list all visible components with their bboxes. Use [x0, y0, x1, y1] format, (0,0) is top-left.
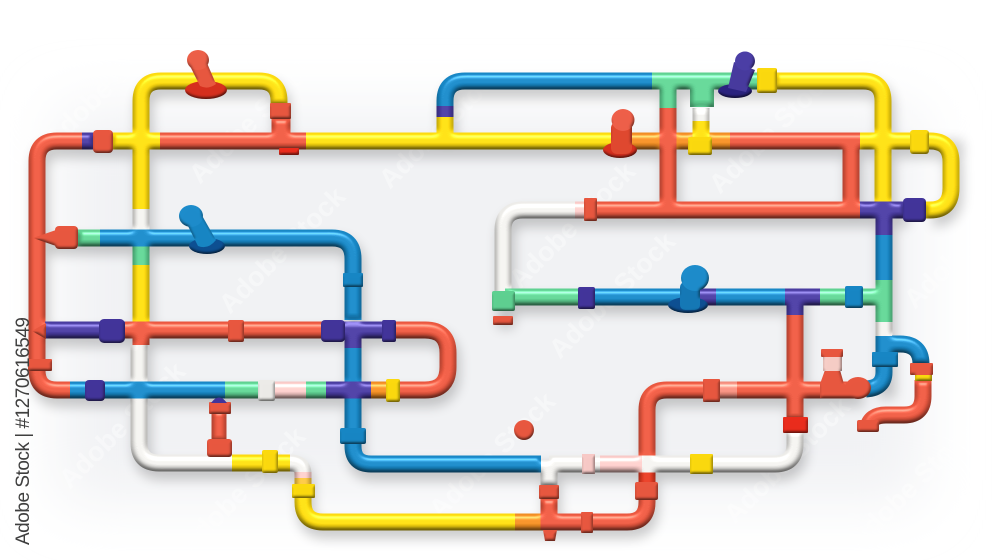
- valve: purple top right: [718, 52, 755, 98]
- watermarks: Adobe Stock: [503, 156, 642, 294]
- watermarks: Adobe Stock: [53, 356, 192, 494]
- pipe: red vertical to white return: [549, 297, 795, 530]
- pipe: main top line: [112, 141, 951, 210]
- pipe: top blue and green line: [445, 81, 883, 204]
- valve: red top left: [185, 50, 227, 99]
- valve: blue left: [179, 205, 225, 254]
- collars: red: [28, 103, 933, 541]
- pipe: middle green blue line: [505, 288, 884, 306]
- watermarks: Adobe Stock: [423, 386, 562, 524]
- pipe: left red riser: [37, 141, 94, 390]
- watermarks: Adobe Stock: [843, 416, 982, 554]
- watermarks: Adobe Stock: [173, 421, 312, 559]
- collars: blue: [340, 273, 898, 444]
- pipe: red stem below lower line: [212, 410, 226, 442]
- collars: white and green: [258, 291, 515, 401]
- watermarks: Adobe Stock: [703, 61, 842, 199]
- collars: purple: [85, 198, 926, 403]
- pipe: white lower-left run into yellow drop: [139, 345, 546, 522]
- pipe cast shadow: [40, 89, 963, 538]
- pipe: purple red loop line: [45, 330, 448, 390]
- pipe: right red branch: [842, 141, 860, 205]
- watermarks: Adobe Stock: [718, 391, 857, 529]
- pipe: right vertical: [866, 206, 921, 389]
- pink band on white return: [582, 454, 595, 474]
- valve: blue middle: [668, 265, 709, 313]
- watermarks: Adobe Stock: [213, 181, 352, 319]
- pipe network: [37, 81, 951, 530]
- stock id label: Adobe Stock | #1270616549: [13, 317, 34, 545]
- pipe: tee branches under green line: [668, 84, 702, 205]
- pipe: lower right red drain: [868, 380, 923, 428]
- watermarks: Adobe Stock: [38, 16, 177, 154]
- watermarks: Adobe Stock: [373, 56, 512, 194]
- pipe: red elbow below arch: [272, 118, 290, 141]
- watermarks: Adobe Stock: [543, 226, 682, 364]
- pipe: red bottom loop to mid junction: [546, 390, 860, 522]
- loose red ball: [514, 420, 534, 440]
- pipe: multicoloured lower line: [70, 382, 386, 398]
- collars: dark red: [279, 148, 808, 433]
- valve: red centre: [603, 109, 637, 158]
- pipe: red and white mid-right line: [503, 210, 905, 300]
- left red arrow stubs: [32, 230, 56, 339]
- pipe: blue middle horizontal and downcomer: [78, 238, 541, 464]
- pipe: yellow upper arch and left riser: [141, 81, 279, 345]
- collars: yellow: [262, 68, 932, 498]
- fittings: [28, 68, 933, 541]
- right red tee and riser: [820, 349, 871, 399]
- watermarks: Adobe Stock: [183, 51, 322, 189]
